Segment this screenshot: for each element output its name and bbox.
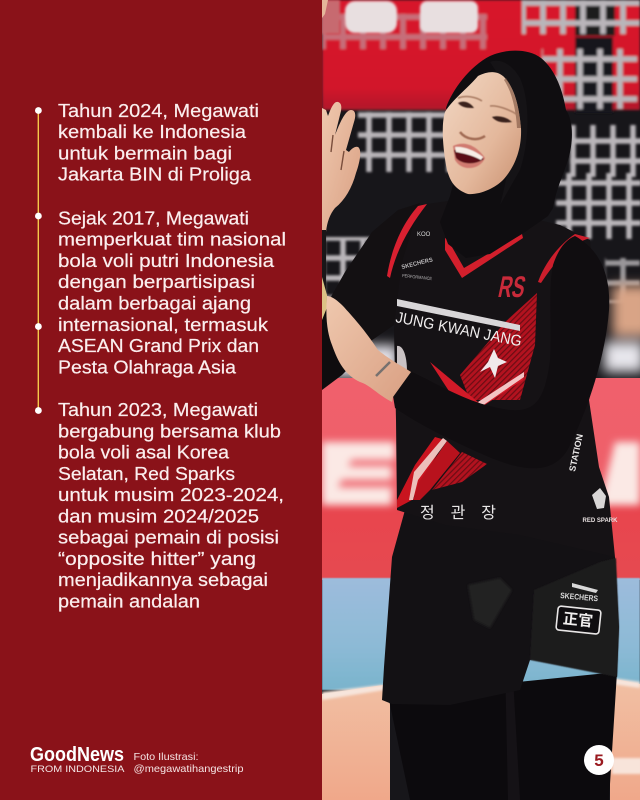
logo: GoodNews from Indonesia: FROM INDONESIA <box>30 764 125 775</box>
shorts logos: RED SPARK <box>583 518 618 524</box>
text block: Tahun 2023: pemain andalan <box>58 592 200 612</box>
photo background: blurred arena <box>322 0 640 800</box>
jersey: sponsor band and name: RS <box>496 271 528 304</box>
face details: eyes, nose, mouth <box>453 97 518 168</box>
timeline: yellow vertical line with dots <box>35 107 42 414</box>
text block: Tahun 2024: Tahun 2024, Megawati <box>58 101 259 121</box>
text block: Tahun 2024: untuk bermain bagi <box>58 144 232 164</box>
text block: Tahun 2024 <box>58 101 259 184</box>
jersey: red trims and side stripes <box>387 204 590 508</box>
text block: Tahun 2024: kembali ke Indonesia <box>58 122 247 142</box>
shorts logos <box>420 433 618 634</box>
text block: Tahun 2023: bola voli asal Korea <box>58 442 230 462</box>
spectators blur <box>322 285 640 377</box>
text block: Sejak 2017: Pesta Olahraga Asia <box>58 358 237 378</box>
text block: Sejak 2017 <box>58 208 286 378</box>
player: left shoulder and arm <box>331 205 414 340</box>
panel: red text background <box>0 0 322 800</box>
logo: GoodNews from Indonesia <box>30 744 125 775</box>
shorts logos: STATION <box>567 433 585 472</box>
player: lower hand and wrist <box>326 296 411 402</box>
text block: Sejak 2017: dengan berpartisipasi <box>58 272 255 292</box>
page number badge <box>584 745 614 775</box>
photo credit: @megawatihangestrip <box>134 763 244 775</box>
text block: Tahun 2023: Tahun 2023, Megawati <box>58 400 258 420</box>
player: raised hand <box>322 102 360 232</box>
text block: Tahun 2023: menjadikannya sebagai <box>58 570 268 590</box>
jersey: sponsor band and name: KOO <box>417 232 431 238</box>
shorts logos: 정관장 <box>420 499 496 523</box>
player: right arm crossing torso <box>393 236 610 409</box>
player: jersey torso <box>394 200 615 557</box>
jersey: sponsor band and name: PERFORMANCE <box>402 273 432 281</box>
text block: Tahun 2023: dan musim 2024/2025 <box>58 506 259 526</box>
text block: Tahun 2023: sebagai pemain di posisi <box>58 528 279 548</box>
text block: Tahun 2023: bergabung bersama klub <box>58 422 281 442</box>
text block: Sejak 2017: dalam berbagai ajang <box>58 294 251 314</box>
logo: GoodNews from Indonesia: GoodNews <box>30 744 124 766</box>
blurred wall lettering <box>322 442 640 505</box>
text block: Tahun 2023: “opposite hitter” yang <box>58 549 256 569</box>
photo: volleyball player Megawati on court <box>322 0 640 800</box>
text block: Tahun 2024: Jakarta BIN di Proliga <box>58 164 252 184</box>
shorts logos: SKECHERS <box>560 591 599 603</box>
player: legs <box>388 672 617 800</box>
jersey: sponsor band and name: JUNG KWAN JANG <box>394 309 523 350</box>
text block: Sejak 2017: ASEAN Grand Prix dan <box>58 336 259 356</box>
page number badge: 5 <box>594 751 604 770</box>
photo credit: Foto Ilustrasi: <box>134 751 198 763</box>
text block: Tahun 2023 <box>58 400 284 612</box>
photo credit <box>134 751 244 775</box>
jersey: sponsor band and name <box>394 232 528 378</box>
text block: Tahun 2023: untuk musim 2023-2024, <box>58 485 284 505</box>
player: hijab <box>440 51 572 258</box>
text block: Sejak 2017: Sejak 2017, Megawati <box>58 208 249 228</box>
player: face <box>443 72 521 194</box>
text block: Tahun 2023: Selatan, Red Sparks <box>58 464 235 484</box>
shorts logos: 正官 <box>562 607 594 632</box>
text block: Sejak 2017: memperkuat tim nasional <box>58 230 286 250</box>
text block: Sejak 2017: bola voli putri Indonesia <box>58 251 275 271</box>
text block: Sejak 2017: internasional, termasuk <box>58 315 269 335</box>
player: shorts <box>382 510 619 705</box>
jersey: sponsor band and name: SKECHERS <box>401 257 434 271</box>
